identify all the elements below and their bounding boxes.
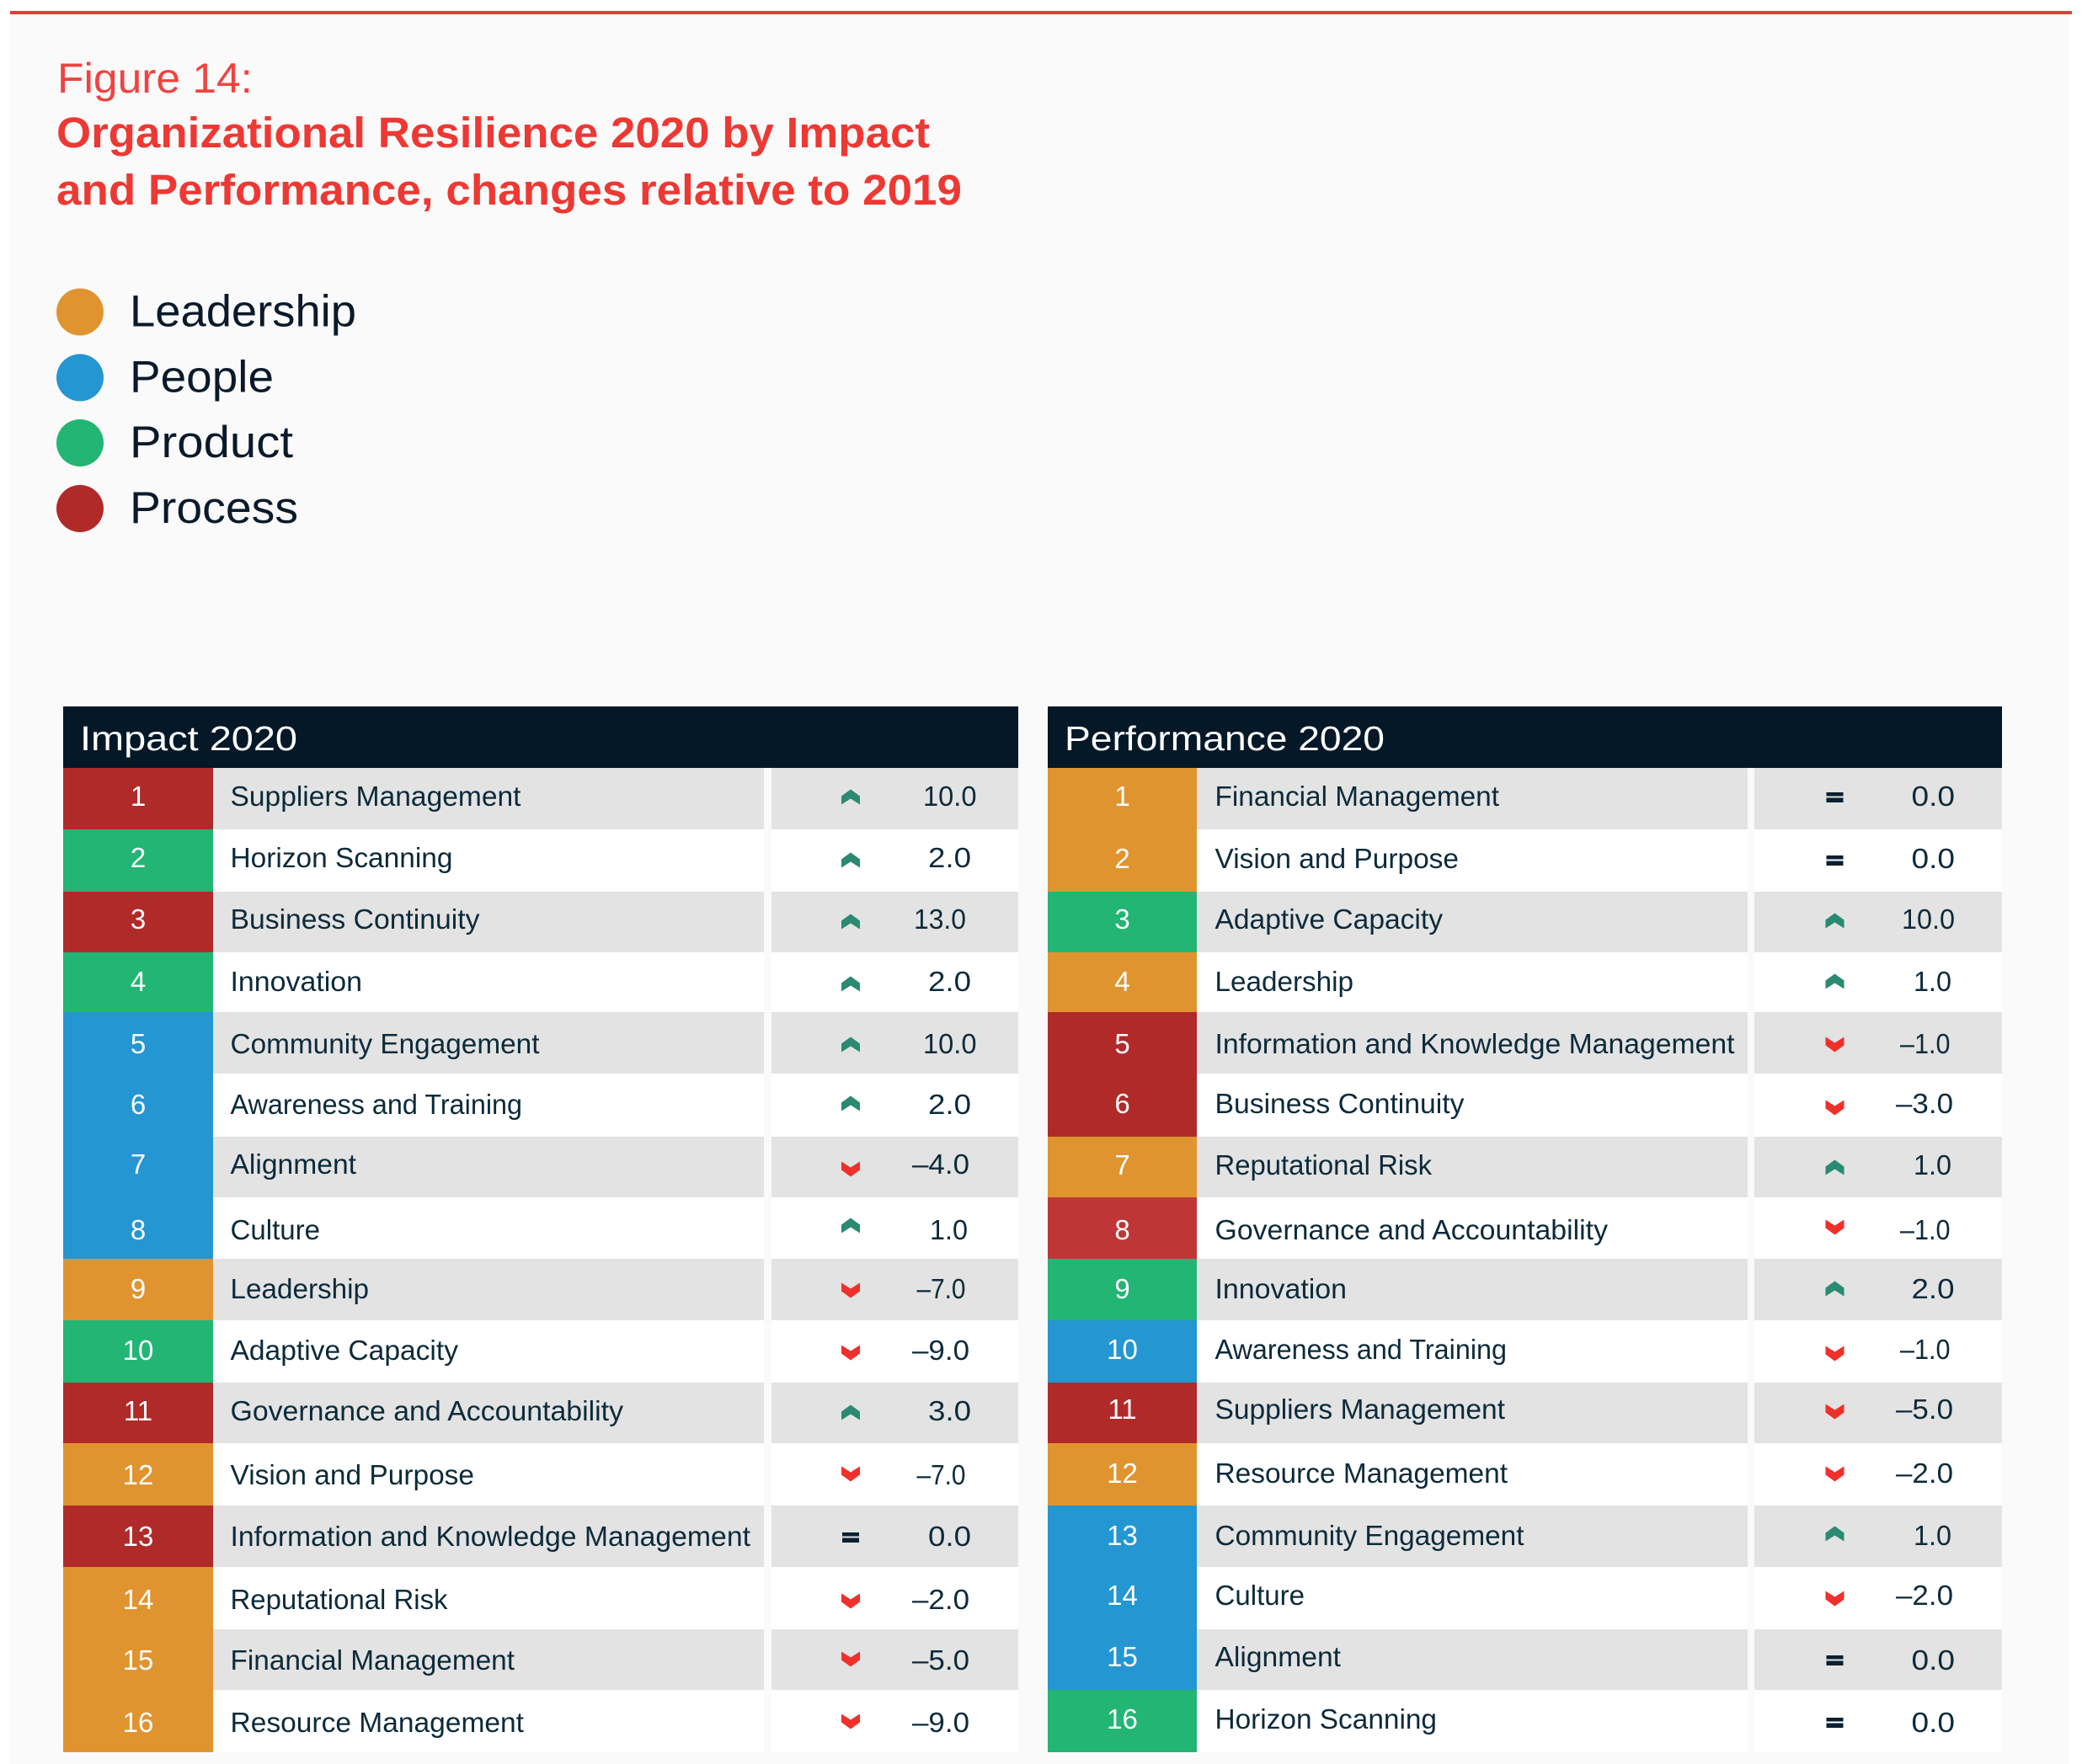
- rank 4: [1048, 952, 1197, 1012]
- row 8: [1048, 1197, 2002, 1259]
- value: [771, 1137, 1018, 1197]
- name: Leadership: [1214, 966, 1353, 997]
- value: 0.0: [928, 1521, 971, 1552]
- table header: Performance 2020: [1048, 706, 2002, 768]
- row 16: [1048, 1690, 2002, 1752]
- name: Suppliers Management: [1214, 1394, 1505, 1425]
- value: 0.0: [1912, 843, 1955, 874]
- name: [213, 1629, 764, 1690]
- name: Adaptive Capacity: [1214, 903, 1444, 935]
- value: [1754, 1443, 2002, 1506]
- row 2: [63, 829, 1018, 892]
- trend arrow up: [841, 1037, 860, 1053]
- name: Reputational Risk: [1214, 1149, 1432, 1180]
- name: [1197, 1690, 1748, 1752]
- value: –1.0: [1900, 1214, 1951, 1245]
- rank 10: 10: [123, 1335, 153, 1366]
- rank 9: 9: [131, 1273, 146, 1304]
- name: [1197, 1259, 1748, 1320]
- value: 0.0: [1912, 1644, 1955, 1676]
- name: [213, 1012, 764, 1074]
- value: [771, 1074, 1018, 1137]
- name: [1197, 1629, 1748, 1690]
- legend item: Product: [56, 418, 293, 467]
- rank 1: 1: [1114, 781, 1130, 812]
- value: [771, 768, 1018, 829]
- rank 9: [1048, 1259, 1197, 1320]
- row 6: [63, 1074, 1018, 1137]
- rank 8: 8: [131, 1214, 146, 1245]
- value: 10.0: [923, 781, 977, 812]
- row 7: [63, 1137, 1018, 1197]
- name: [213, 1197, 764, 1259]
- rank 2: 2: [131, 842, 146, 873]
- rank 12: [1048, 1443, 1197, 1506]
- trend arrow up: [841, 790, 860, 805]
- rank 14: 14: [1107, 1580, 1138, 1611]
- trend equal: [1826, 1718, 1843, 1728]
- row 9: [1048, 1259, 2002, 1320]
- name: Business Continuity: [1214, 1088, 1465, 1119]
- trend arrow down: [841, 1467, 860, 1482]
- row 3: [63, 892, 1018, 952]
- row 11: [1048, 1383, 2002, 1443]
- trend arrow up: [1826, 1526, 1844, 1541]
- rank 15: 15: [1107, 1641, 1138, 1672]
- value: –1.0: [1900, 1028, 1951, 1059]
- name: [1197, 1074, 1748, 1137]
- rank 4: 4: [131, 966, 146, 997]
- rank 12: 12: [123, 1459, 153, 1490]
- trend arrow down: [1826, 1591, 1844, 1607]
- panel: Impact 2020 table: [63, 706, 1018, 1752]
- rank 3: 3: [131, 903, 146, 935]
- name: Financial Management: [1214, 781, 1499, 812]
- rank 10: [63, 1320, 213, 1383]
- name: [1197, 952, 1748, 1012]
- row 10: [1048, 1320, 2002, 1383]
- name: [213, 1506, 764, 1567]
- trend arrow down: [841, 1714, 860, 1729]
- trend arrow down: [1826, 1219, 1844, 1234]
- value: [1754, 892, 2002, 952]
- legend item: Process: [56, 483, 298, 533]
- rank 9: [63, 1259, 213, 1320]
- trend arrow down: [841, 1283, 860, 1298]
- trend arrow up: [1826, 913, 1844, 928]
- name: [213, 892, 764, 952]
- rank 13: [1048, 1506, 1197, 1567]
- trend arrow down: [1826, 1404, 1844, 1420]
- rank 14: 14: [123, 1584, 153, 1615]
- legend item: People: [56, 352, 274, 402]
- rank 6: 6: [131, 1089, 146, 1120]
- value: 1.0: [930, 1214, 968, 1245]
- rank 13: 13: [123, 1521, 153, 1552]
- value: [1754, 1567, 2002, 1629]
- value: [771, 952, 1018, 1012]
- row 12: [1048, 1443, 2002, 1506]
- name: [1197, 1320, 1748, 1383]
- value: –9.0: [912, 1707, 969, 1738]
- row 13: [1048, 1506, 2002, 1567]
- value: [1754, 1629, 2002, 1690]
- name: Governance and Accountability: [231, 1395, 624, 1426]
- rank 6: [63, 1074, 213, 1137]
- value: –4.0: [912, 1148, 969, 1180]
- name: [213, 1137, 764, 1197]
- value: 0.0: [1912, 781, 1955, 812]
- rank 8: [1048, 1197, 1197, 1259]
- row 14: [1048, 1567, 2002, 1629]
- rank 13: 13: [1107, 1520, 1138, 1551]
- name: Innovation: [231, 966, 362, 997]
- trend equal: [1826, 792, 1843, 802]
- name: Culture: [231, 1214, 320, 1245]
- name: [1197, 892, 1748, 952]
- name: Alignment: [1214, 1641, 1341, 1672]
- value: –3.0: [1896, 1088, 1953, 1119]
- rank 11: [63, 1383, 213, 1443]
- name: Information and Knowledge Management: [231, 1521, 750, 1552]
- rank 15: 15: [123, 1644, 153, 1676]
- row 15: [1048, 1629, 2002, 1690]
- name: [213, 829, 764, 892]
- name: Resource Management: [1214, 1458, 1508, 1489]
- rank 2: [63, 829, 213, 892]
- rank 11: 11: [124, 1395, 152, 1426]
- value: [771, 892, 1018, 952]
- name: Alignment: [231, 1148, 356, 1180]
- table header: Impact 2020: [63, 706, 1018, 768]
- trend arrow down: [1826, 1346, 1844, 1361]
- value: [1754, 1074, 2002, 1137]
- name: Horizon Scanning: [1214, 1703, 1437, 1735]
- name: Suppliers Management: [231, 781, 520, 812]
- trend arrow up: [841, 852, 860, 867]
- rank 3: 3: [1114, 903, 1130, 935]
- row 15: [63, 1629, 1018, 1690]
- value: [1754, 1320, 2002, 1383]
- value: [771, 1443, 1018, 1506]
- rank 15: [1048, 1629, 1197, 1690]
- name: [1197, 1567, 1748, 1629]
- row 5: [1048, 1012, 2002, 1074]
- rank 5: 5: [1114, 1028, 1130, 1059]
- value: [771, 1383, 1018, 1443]
- row 2: [1048, 829, 2002, 892]
- value: 1.0: [1914, 1520, 1951, 1551]
- value: 10.0: [923, 1028, 977, 1059]
- rank 7: 7: [1114, 1149, 1130, 1180]
- name: [213, 1074, 764, 1137]
- value: [1754, 1259, 2002, 1320]
- name: [1197, 1012, 1748, 1074]
- figure title line 2: and Performance, changes relative to 2019: [56, 166, 962, 214]
- rank 14: [1048, 1567, 1197, 1629]
- value: 2.0: [928, 966, 971, 997]
- rank 11: [1048, 1383, 1197, 1443]
- rank 7: 7: [131, 1148, 146, 1180]
- rank 14: [63, 1567, 213, 1629]
- value: [771, 1690, 1018, 1752]
- rank 8: 8: [1114, 1214, 1130, 1245]
- value: [771, 1567, 1018, 1629]
- name: Resource Management: [231, 1707, 524, 1738]
- rank 13: [63, 1506, 213, 1567]
- rank 15: [63, 1629, 213, 1690]
- rank 1: [1048, 768, 1197, 829]
- trend arrow up: [1826, 1282, 1844, 1297]
- value: 2.0: [1912, 1273, 1954, 1304]
- name: [1197, 1137, 1748, 1197]
- name: Adaptive Capacity: [231, 1335, 459, 1366]
- rank 12: 12: [1107, 1458, 1138, 1489]
- value: 1.0: [1914, 1149, 1951, 1180]
- row 6: [1048, 1074, 2002, 1137]
- trend arrow up: [841, 1096, 860, 1111]
- name: Horizon Scanning: [231, 842, 453, 873]
- rank 7: [1048, 1137, 1197, 1197]
- name: Business Continuity: [231, 903, 480, 935]
- rank 1: [63, 768, 213, 829]
- trend arrow down: [841, 1162, 860, 1177]
- name: [213, 1690, 764, 1752]
- value: [1754, 768, 2002, 829]
- name: [213, 1443, 764, 1506]
- trend arrow down: [1826, 1467, 1844, 1482]
- rank 5: [1048, 1012, 1197, 1074]
- name: Culture: [1214, 1580, 1305, 1611]
- legend item: Leadership: Leadership: [130, 286, 356, 337]
- name: [1197, 1443, 1748, 1506]
- rank 16: [1048, 1690, 1197, 1752]
- name: Community Engagement: [231, 1028, 539, 1059]
- trend arrow up: [841, 1404, 860, 1420]
- name: [213, 1259, 764, 1320]
- row 3: [1048, 892, 2002, 952]
- value: [771, 1259, 1018, 1320]
- row 1: [63, 768, 1018, 829]
- value: 13.0: [914, 903, 966, 935]
- value: 10.0: [1902, 903, 1955, 935]
- rank 16: [63, 1690, 213, 1752]
- row 8: [63, 1197, 1018, 1259]
- value: –7.0: [916, 1273, 965, 1304]
- rank 4: [63, 952, 213, 1012]
- trend arrow down: [1826, 1100, 1844, 1115]
- trend arrow down: [841, 1593, 860, 1608]
- row 9: [63, 1259, 1018, 1320]
- trend arrow up: [841, 914, 860, 930]
- name: [213, 1567, 764, 1629]
- rank 2: [1048, 829, 1197, 892]
- trend equal: [1826, 1655, 1843, 1665]
- value: [771, 1197, 1018, 1259]
- rank 12: [63, 1443, 213, 1506]
- value: –1.0: [1900, 1334, 1951, 1365]
- name: [1197, 1197, 1748, 1259]
- name: Innovation: [1214, 1273, 1347, 1304]
- value: 0.0: [1912, 1707, 1955, 1738]
- name: [213, 1320, 764, 1383]
- value: –2.0: [1896, 1580, 1953, 1611]
- name: Awareness and Training: [231, 1089, 522, 1120]
- value: –5.0: [912, 1644, 969, 1676]
- value: [1754, 829, 2002, 892]
- trend equal: [842, 1532, 859, 1543]
- legend item: People: People: [130, 352, 274, 402]
- legend item: Process: Process: [130, 483, 298, 533]
- table header: Performance 2020: Performance 2020: [1065, 719, 1385, 758]
- rank 2: 2: [1114, 843, 1130, 874]
- rank 3: [1048, 892, 1197, 952]
- row 16: [63, 1690, 1018, 1752]
- rank 5: [63, 1012, 213, 1074]
- value: [1754, 1383, 2002, 1443]
- value: –7.0: [916, 1459, 965, 1490]
- value: 3.0: [928, 1395, 971, 1426]
- title: [56, 55, 962, 214]
- value: [771, 1012, 1018, 1074]
- value: [771, 1320, 1018, 1383]
- rank 4: 4: [1114, 966, 1130, 997]
- rank 1: 1: [131, 781, 146, 812]
- panel: Performance 2020 table: [1048, 706, 2002, 1752]
- row 4: [63, 952, 1018, 1012]
- legend: [56, 286, 356, 533]
- value: 2.0: [928, 1089, 971, 1120]
- rank 11: 11: [1108, 1394, 1137, 1425]
- rank 6: [1048, 1074, 1197, 1137]
- value: [1754, 1137, 2002, 1197]
- row 13: [63, 1506, 1018, 1567]
- name: Community Engagement: [1214, 1520, 1524, 1551]
- name: Vision and Purpose: [231, 1459, 474, 1490]
- name: Information and Knowledge Management: [1214, 1028, 1735, 1059]
- rank 3: [63, 892, 213, 952]
- name: Reputational Risk: [231, 1584, 448, 1615]
- name: [1197, 1506, 1748, 1567]
- trend arrow up: [1826, 1160, 1844, 1175]
- row 12: [63, 1443, 1018, 1506]
- figure number: Figure 14:: [57, 55, 253, 102]
- value: [771, 1506, 1018, 1567]
- name: [1197, 1383, 1748, 1443]
- value: [1754, 1197, 2002, 1259]
- rank 8: [63, 1197, 213, 1259]
- value: [1754, 1690, 2002, 1752]
- legend item: Product: Product: [130, 418, 293, 467]
- table header: Impact 2020: Impact 2020: [80, 719, 297, 758]
- name: Leadership: [231, 1273, 369, 1304]
- trend arrow up: [1826, 973, 1844, 989]
- rank 5: 5: [131, 1028, 146, 1059]
- value: 1.0: [1914, 966, 1951, 997]
- trend arrow down: [1826, 1037, 1844, 1053]
- value: –5.0: [1896, 1394, 1953, 1425]
- row 14: [63, 1567, 1018, 1629]
- trend arrow down: [841, 1346, 860, 1361]
- row 10: [63, 1320, 1018, 1383]
- rank 6: 6: [1114, 1088, 1130, 1119]
- name: [213, 1383, 764, 1443]
- row 7: [1048, 1137, 2002, 1197]
- name: [213, 768, 764, 829]
- value: 2.0: [928, 842, 971, 873]
- rank 7: [63, 1137, 213, 1197]
- row 11: [63, 1383, 1018, 1443]
- name: [213, 952, 764, 1012]
- name: Awareness and Training: [1214, 1334, 1507, 1365]
- value: [771, 1629, 1018, 1690]
- name: Vision and Purpose: [1214, 843, 1459, 874]
- trend arrow down: [841, 1652, 860, 1667]
- trend equal: [1826, 855, 1843, 866]
- name: Governance and Accountability: [1214, 1214, 1609, 1245]
- trend arrow up: [841, 1218, 860, 1233]
- rank 9: 9: [1114, 1273, 1130, 1304]
- figure title line 1: Organizational Resilience 2020 by Impact: [56, 109, 930, 157]
- name: [1197, 768, 1748, 829]
- value: [771, 829, 1018, 892]
- value: [1754, 1506, 2002, 1567]
- name: [1197, 829, 1748, 892]
- rank 16: 16: [1107, 1703, 1138, 1735]
- row 4: [1048, 952, 2002, 1012]
- rank 10: [1048, 1320, 1197, 1383]
- value: –2.0: [1896, 1458, 1953, 1489]
- name: Financial Management: [231, 1644, 515, 1676]
- row 1: [1048, 768, 2002, 829]
- trend arrow up: [841, 977, 860, 992]
- rank 16: 16: [123, 1707, 153, 1738]
- row 5: [63, 1012, 1018, 1074]
- value: [1754, 1012, 2002, 1074]
- rank 10: 10: [1107, 1334, 1138, 1365]
- value: –2.0: [912, 1584, 969, 1615]
- value: –9.0: [912, 1335, 969, 1366]
- value: [1754, 952, 2002, 1012]
